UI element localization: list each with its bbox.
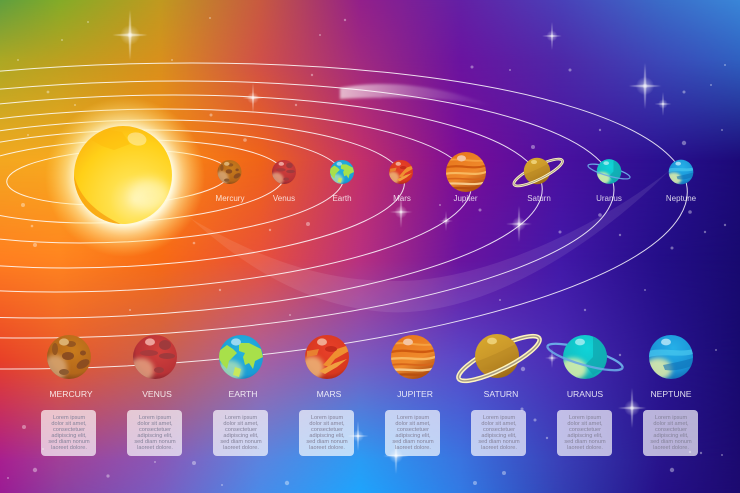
card: mercury <box>41 410 96 456</box>
planet: neptune <box>644 335 693 380</box>
planet: uranus <box>545 335 625 380</box>
small planet: uranus <box>587 159 631 184</box>
orbit planet labels: Saturn <box>527 194 551 203</box>
card: jupiter: adipiscing elit, <box>395 433 431 439</box>
card: uranus: adipiscing elit, <box>567 433 603 439</box>
orbit planet labels: Earth <box>332 194 352 203</box>
orbit planet labels: Mars <box>393 194 411 203</box>
small planet: neptune <box>666 160 693 185</box>
small planet: jupiter <box>446 152 486 192</box>
name: earth: EARTH <box>229 389 257 399</box>
card: earth: sed diam nonum <box>220 439 262 445</box>
card: venus: laoreet dolore. <box>137 445 173 451</box>
small planet: saturn <box>511 155 565 190</box>
comet tail band <box>190 170 670 312</box>
planet: mars <box>300 335 349 380</box>
card: neptune: dolor sit amet, <box>653 421 689 427</box>
card: neptune: laoreet dolore. <box>653 445 689 451</box>
small planet: earth <box>328 160 354 186</box>
card: uranus: dolor sit amet, <box>567 421 603 427</box>
card: mars: Lorem ipsum <box>311 415 343 421</box>
card: saturn: consectetuer <box>483 427 515 433</box>
column: saturn <box>454 329 544 456</box>
name: venus: VENUS <box>142 389 172 399</box>
card: uranus <box>557 410 612 456</box>
card: saturn <box>471 410 526 456</box>
sparkle stars <box>112 10 671 474</box>
card: mercury: adipiscing elit, <box>51 433 87 439</box>
card: earth: laoreet dolore. <box>223 445 259 451</box>
card: mercury: consectetuer <box>53 427 85 433</box>
card: earth: dolor sit amet, <box>223 421 259 427</box>
card: uranus: laoreet dolore. <box>567 445 603 451</box>
planet: saturn <box>454 329 544 388</box>
card: mars: adipiscing elit, <box>309 433 345 439</box>
column: earth <box>213 335 268 456</box>
card: neptune: consectetuer <box>655 427 687 433</box>
card: mercury: laoreet dolore. <box>51 445 87 451</box>
card: jupiter: dolor sit amet, <box>395 421 431 427</box>
card: saturn: adipiscing elit, <box>481 433 517 439</box>
small planet: venus <box>269 160 296 186</box>
column: mercury <box>41 335 96 456</box>
name: jupiter: JUPITER <box>397 389 433 399</box>
column: neptune <box>643 335 698 456</box>
card: jupiter: Lorem ipsum <box>397 415 429 421</box>
card: jupiter <box>385 410 440 456</box>
card: venus: sed diam nonum <box>134 439 176 445</box>
card: jupiter: sed diam nonum <box>392 439 434 445</box>
name: mars: MARS <box>317 389 342 399</box>
planet: venus <box>128 335 177 382</box>
card: earth: adipiscing elit, <box>223 433 259 439</box>
card: saturn: sed diam nonum <box>478 439 520 445</box>
card: mars <box>299 410 354 456</box>
orbit planets row <box>215 152 693 192</box>
card: uranus: consectetuer <box>569 427 601 433</box>
name: neptune: NEPTUNE <box>650 389 692 399</box>
card: venus: dolor sit amet, <box>137 421 173 427</box>
card: saturn: Lorem ipsum <box>483 415 515 421</box>
small planet: mercury <box>215 160 242 185</box>
name: saturn: SATURN <box>484 389 518 399</box>
name: uranus: URANUS <box>567 389 603 399</box>
card: neptune: sed diam nonum <box>650 439 692 445</box>
planet: mercury <box>43 335 91 381</box>
card: neptune <box>643 410 698 456</box>
planet: earth <box>215 335 263 382</box>
card: mercury: sed diam nonum <box>48 439 90 445</box>
column: venus <box>127 335 182 456</box>
card: venus: adipiscing elit, <box>137 433 173 439</box>
card: saturn: laoreet dolore. <box>481 445 517 451</box>
card: mercury: dolor sit amet, <box>51 421 87 427</box>
planet: jupiter <box>391 335 435 379</box>
card: earth: Lorem ipsum <box>225 415 257 421</box>
orbit planet labels <box>216 194 697 203</box>
card: mars: laoreet dolore. <box>309 445 345 451</box>
card: mars: consectetuer <box>311 427 343 433</box>
card: neptune: adipiscing elit, <box>653 433 689 439</box>
card: mars: dolor sit amet, <box>309 421 345 427</box>
card: uranus: Lorem ipsum <box>569 415 601 421</box>
card: jupiter: consectetuer <box>397 427 429 433</box>
card: mars: sed diam nonum <box>306 439 348 445</box>
card: earth <box>213 410 268 456</box>
column: uranus <box>545 335 625 456</box>
small planet: mars <box>386 160 413 185</box>
column: mars <box>299 335 354 456</box>
orbit lines <box>0 63 740 369</box>
card: earth: consectetuer <box>225 427 257 433</box>
card: jupiter: laoreet dolore. <box>395 445 431 451</box>
card: mercury: Lorem ipsum <box>53 415 85 421</box>
orbit planet labels: Neptune <box>666 194 697 203</box>
name: mercury: MERCURY <box>49 389 93 399</box>
orbit planet labels: Jupiter <box>453 194 478 203</box>
orbit planet labels: Mercury <box>216 194 244 203</box>
comet streak <box>340 84 492 106</box>
card: venus <box>127 410 182 456</box>
card: venus: Lorem ipsum <box>139 415 171 421</box>
orbit planet labels: Venus <box>273 194 295 203</box>
card: uranus: sed diam nonum <box>564 439 606 445</box>
card: neptune: Lorem ipsum <box>655 415 687 421</box>
sun <box>45 97 205 257</box>
card: saturn: dolor sit amet, <box>481 421 517 427</box>
card: venus: consectetuer <box>139 427 171 433</box>
orbit planet labels: Uranus <box>596 194 622 203</box>
column: jupiter <box>385 335 440 456</box>
